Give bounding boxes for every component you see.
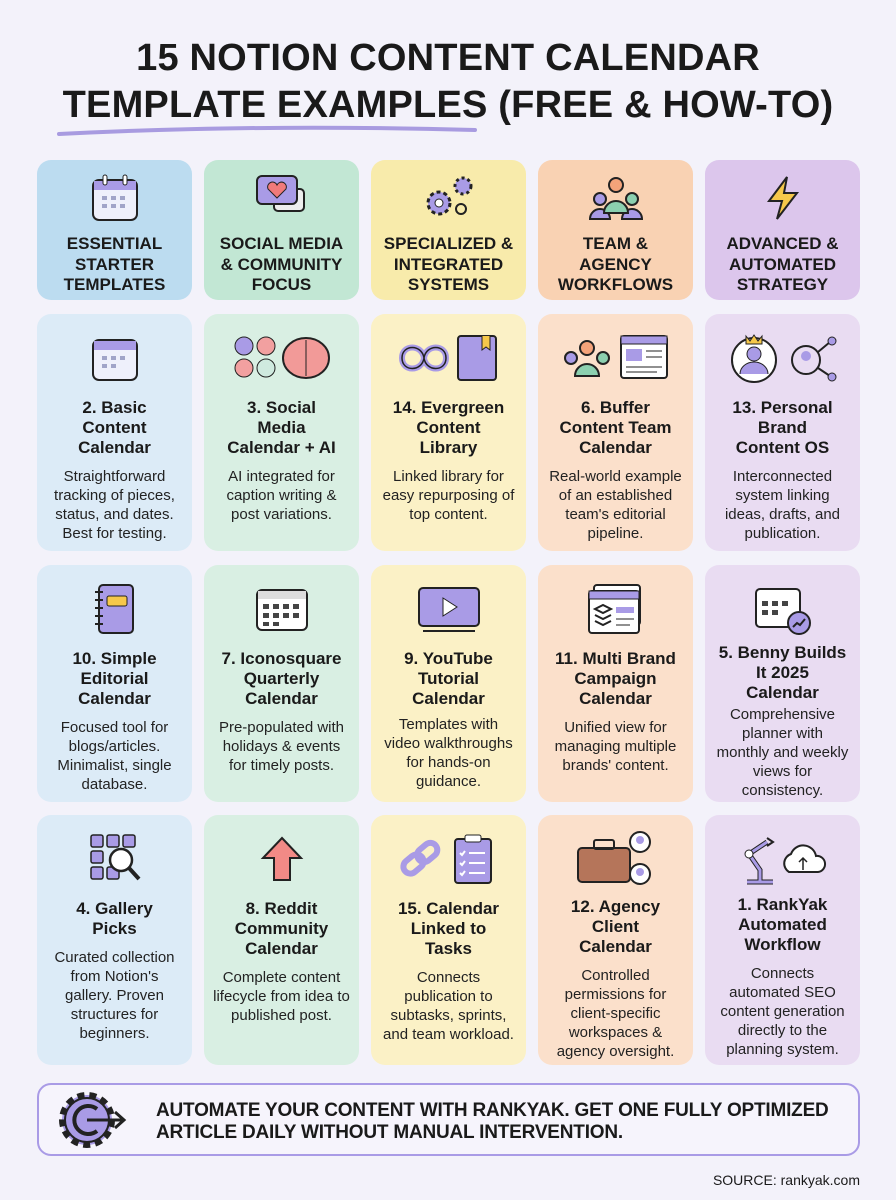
- header: team: WORKFLOWS: [558, 275, 673, 294]
- card: evergreen: Linked library for easy repurposing of top content.: [383, 468, 514, 523]
- title: 15 NOTION CONTENT CALENDAR: [136, 37, 760, 79]
- card: basic content calendar: [37, 314, 192, 551]
- card: youtube: Calendar: [412, 689, 485, 708]
- icon: stacked window: [588, 584, 641, 634]
- card: reddit: [204, 815, 359, 1065]
- icon: briefcase + users: [577, 831, 651, 885]
- card: basic content calendar: Straightforward tracking of pieces, status, and dates. Best for testing.: [54, 468, 175, 542]
- card: buffer: Real-world example of an established team's editorial pipeline.: [549, 468, 682, 542]
- header: specialized: [371, 160, 526, 300]
- card: social media calendar + AI: Media: [257, 418, 306, 437]
- card: calendar linked to tasks: [371, 815, 526, 1065]
- footer text: AUTOMATE YOUR CONTENT WITH RANKYAK. GET ONE FULLY OPTIMIZED: [156, 1100, 829, 1121]
- card: evergreen: [371, 314, 526, 551]
- icon: grid magnifier: [90, 834, 140, 880]
- icon: up arrow: [260, 836, 304, 881]
- header: advanced: ADVANCED &: [726, 234, 839, 253]
- icon: avatar network: [731, 334, 836, 383]
- card: agency client: Calendar: [579, 937, 652, 956]
- header: social media: [204, 160, 359, 300]
- icon: calendar grid: [256, 589, 308, 631]
- card: iconosquare: Calendar: [245, 689, 318, 708]
- title: TEMPLATE EXAMPLES (FREE & HOW-TO): [63, 84, 833, 126]
- card: youtube: [371, 565, 526, 802]
- card: iconosquare: Pre-populated with holidays & events for timely posts.: [219, 719, 344, 774]
- card: rankyak: Workflow: [744, 935, 821, 954]
- header: social media: & COMMUNITY: [221, 254, 342, 274]
- card: gallery picks: Curated collection from Notion's gallery. Proven structures for beginners.: [54, 949, 175, 1042]
- card: rankyak: [705, 815, 860, 1065]
- card: reddit: 8. Reddit: [246, 899, 317, 918]
- card: calendar linked to tasks: 15. Calendar: [398, 899, 499, 918]
- header: essential starter templates: [37, 160, 192, 300]
- card: gallery picks: Picks: [92, 919, 137, 938]
- card: agency client: Controlled permissions for client-specific workspaces & agency oversight.: [557, 967, 674, 1060]
- header: social media: FOCUS: [252, 275, 311, 294]
- icon: people: [589, 177, 643, 220]
- card: buffer: Calendar: [579, 438, 652, 457]
- card: evergreen: Library: [420, 438, 477, 457]
- card: rankyak: Automated: [738, 915, 827, 934]
- card: agency client: [538, 815, 693, 1065]
- icon: gear arrow: [59, 1092, 126, 1148]
- card: rankyak: 1. RankYak: [738, 895, 827, 914]
- card: evergreen: Content: [416, 418, 481, 437]
- card: simple editorial: Calendar: [78, 689, 151, 708]
- header: advanced: [705, 160, 860, 300]
- card: reddit: Calendar: [245, 939, 318, 958]
- header: advanced: AUTOMATED: [729, 254, 836, 274]
- card: benny builds it: It 2025: [756, 663, 809, 682]
- card: iconosquare: [204, 565, 359, 802]
- card: benny builds it: Comprehensive planner with monthly and weekly views for consistency.: [717, 706, 848, 799]
- card: calendar linked to tasks: Linked to: [411, 919, 486, 938]
- card: multi brand: Campaign: [574, 669, 657, 688]
- icon: video player: [418, 587, 480, 632]
- card: agency client: 12. Agency: [571, 897, 660, 916]
- card: rankyak: Connects automated SEO content generation directly to the planning system.: [720, 965, 845, 1058]
- header: team: AGENCY: [579, 254, 652, 274]
- title: [63, 37, 833, 126]
- card: social media calendar + AI: 3. Social: [247, 398, 316, 417]
- icon: calendar: [92, 174, 138, 221]
- icon: infinity + book: [399, 335, 497, 381]
- icon: calendar + chart: [755, 588, 811, 635]
- card: buffer: 6. Buffer: [581, 398, 650, 417]
- card: basic content calendar: Content: [82, 418, 147, 437]
- footer text: ARTICLE DAILY WITHOUT MANUAL INTERVENTION.: [156, 1122, 623, 1143]
- card: evergreen: 14. Evergreen: [393, 398, 504, 417]
- icon: chat heart: [256, 175, 305, 212]
- card: gallery picks: [37, 815, 192, 1065]
- icon: notebook: [95, 584, 134, 634]
- icon: team + browser: [564, 335, 668, 379]
- card: reddit: Complete content lifecycle from idea to published post.: [213, 969, 350, 1024]
- card: simple editorial: [37, 565, 192, 802]
- card: multi brand: Unified view for managing multiple brands' content.: [555, 719, 676, 774]
- card: basic content calendar: 2. Basic: [82, 398, 147, 417]
- title underline: [57, 126, 477, 136]
- footer banner: [37, 1083, 860, 1156]
- card: social media calendar + AI: Calendar + AI: [227, 438, 336, 457]
- header: essential starter templates: ESSENTIAL: [67, 234, 162, 253]
- header: essential starter templates: TEMPLATES: [64, 275, 165, 294]
- card: benny builds it: Calendar: [746, 683, 819, 702]
- header: advanced: STRATEGY: [737, 275, 828, 294]
- icon: gears: [426, 176, 472, 216]
- card: benny builds it: [705, 565, 860, 802]
- card: social media calendar + AI: AI integrated for caption writing & post variations.: [226, 468, 337, 523]
- card: gallery picks: 4. Gallery: [76, 899, 153, 918]
- card: social media calendar + AI: [204, 314, 359, 551]
- source: SOURCE: rankyak.com: [713, 1172, 860, 1188]
- header: specialized: SPECIALIZED &: [384, 234, 513, 253]
- card: personal brand: 13. Personal: [732, 398, 833, 417]
- card: personal brand: Interconnected system linking ideas, drafts, and publication.: [725, 468, 840, 542]
- card: iconosquare: 7. Iconosquare: [222, 649, 341, 668]
- card: youtube: Tutorial: [418, 669, 479, 688]
- card: reddit: Community: [235, 919, 328, 938]
- card: personal brand: Brand: [758, 418, 807, 437]
- footer text: [156, 1100, 829, 1143]
- card: buffer: [538, 314, 693, 551]
- card: calendar linked to tasks: Connects publication to subtasks, sprints, and team workload.: [383, 969, 514, 1043]
- card: iconosquare: Quarterly: [244, 669, 319, 688]
- icon: calendar: [92, 339, 138, 381]
- card: simple editorial: 10. Simple: [72, 649, 157, 668]
- card: multi brand: Calendar: [579, 689, 652, 708]
- header: team: [538, 160, 693, 300]
- icon: chain + checklist: [400, 834, 492, 884]
- icon: robot arm + cloud: [744, 837, 826, 884]
- header: specialized: INTEGRATED: [394, 254, 503, 274]
- card: personal brand: Content OS: [736, 438, 829, 457]
- icon: lightning: [767, 176, 799, 220]
- header: team: TEAM &: [583, 234, 648, 253]
- card: multi brand: [538, 565, 693, 802]
- card: agency client: Client: [592, 917, 639, 936]
- card: buffer: Content Team: [559, 418, 672, 437]
- header: essential starter templates: STARTER: [75, 254, 154, 274]
- card: simple editorial: Focused tool for blogs/articles. Minimalist, single database.: [57, 719, 172, 793]
- card: benny builds it: 5. Benny Builds: [719, 643, 846, 662]
- card: youtube: 9. YouTube: [404, 649, 493, 668]
- card: multi brand: 11. Multi Brand: [555, 649, 676, 668]
- card: youtube: Templates with video walkthroughs for hands-on guidance.: [384, 716, 513, 790]
- header: specialized: SYSTEMS: [408, 275, 489, 294]
- card: calendar linked to tasks: Tasks: [425, 939, 472, 958]
- header: social media: SOCIAL MEDIA: [220, 234, 343, 253]
- card: basic content calendar: Calendar: [78, 438, 151, 457]
- icon: social + brain: [234, 336, 330, 379]
- card: simple editorial: Editorial: [80, 669, 148, 688]
- card: personal brand: [705, 314, 860, 551]
